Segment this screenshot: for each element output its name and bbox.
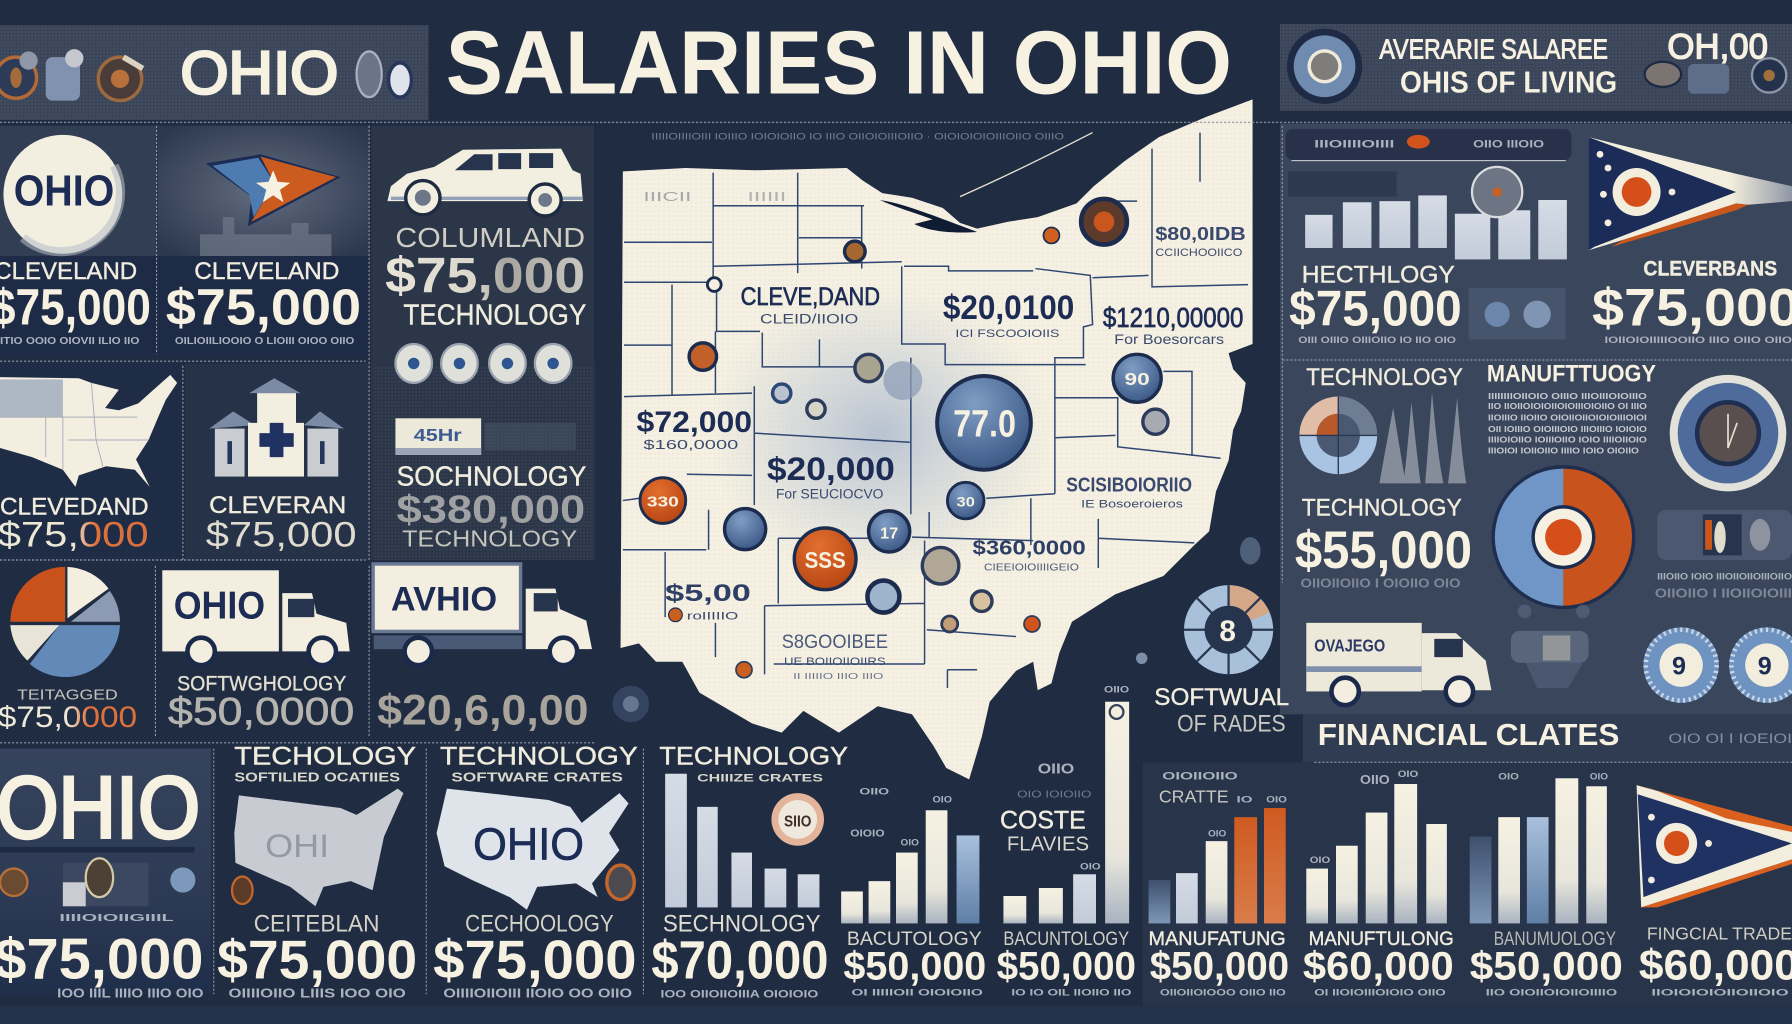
icon: badge: SIIO [784, 813, 811, 830]
icon: hospital building [209, 378, 344, 477]
value: $380,000 [397, 488, 585, 531]
panel: right header banner [1280, 24, 1792, 111]
icon: Ohio circle badge: OHIO [14, 168, 114, 216]
map label: 20,0100 [943, 289, 1074, 340]
chart: bars group C: IO [1237, 794, 1253, 804]
map text: faint corner labels: IIICII [643, 190, 691, 204]
chart: bars group D: OIO [1310, 855, 1330, 865]
caption: OILIOIILIOOIO O LIOIII OIOO OIIO [175, 336, 354, 347]
map label: Scisiboioriio: SCISIBOIORIIO [1066, 473, 1192, 496]
heading: software: SOFTWUAL [1154, 684, 1289, 711]
chart: donut [1299, 397, 1377, 474]
caption: IOO OIIOIIOIIIA OIOIOIO [661, 989, 818, 1001]
map text: faint corner labels [643, 190, 786, 204]
panel: white US map column [433, 743, 638, 1001]
map label: Cleveland [741, 283, 880, 326]
text block: costs [1000, 762, 1091, 855]
map label: 72,000 [637, 406, 752, 452]
map label: Scisiboioriio [1066, 473, 1192, 510]
value: $50,000 [843, 944, 986, 988]
heading: software [1154, 684, 1289, 737]
chart: bars group E [1470, 771, 1608, 923]
text block: costs: FLAVIES [1007, 832, 1089, 855]
marker: orange SSS [794, 528, 856, 590]
caption: financial side: OIO OI I IOEIOI [1669, 731, 1792, 746]
map label: 8gooibee: II IIIIIO IIIO IIIO [793, 672, 883, 681]
subheading: CHIIIZE CRATES [697, 773, 823, 785]
chart: pie [10, 567, 120, 677]
marker: orange 330: 330 [647, 494, 679, 510]
paragraph block: IIIIOIOIIO IOIIIOIIO IOIO IIIIOIIOIO [1488, 435, 1647, 444]
icon group: header emblems [1645, 58, 1786, 94]
label: MANUFATUNG [1149, 928, 1286, 950]
label: CLEVELAND [194, 258, 339, 285]
heading: financial: FINANCIAL CLATES [1318, 717, 1619, 752]
chart: bars group A [841, 786, 979, 923]
panel: US map cell [0, 363, 183, 560]
heading: TECHNOLOGY [659, 743, 848, 771]
label: COLUMLAND [395, 222, 585, 253]
label: TECHNOLOGY [1306, 364, 1463, 391]
value: $75,000 [433, 928, 637, 990]
label: TEITAGGED [17, 687, 118, 703]
marker group: small rings [689, 199, 1168, 678]
icon: ghost pin [1240, 537, 1261, 565]
paragraph block: IIIIIIIIOIIOIO OIIIO IIIOIIIOIOIIIO [1488, 392, 1647, 401]
heading: software: OF RADES [1177, 710, 1286, 737]
map label: 80,0IDB: $80,0IDB [1155, 223, 1246, 244]
icon: round badge [1287, 29, 1362, 104]
caption: OIIOIIOIOOO OIIO IIO [1160, 987, 1286, 997]
chart: large pie [1491, 465, 1635, 609]
heading: TECHNOLOGY [440, 743, 638, 771]
chart: bars group A: OIO [901, 838, 919, 848]
icon: faded US map: OHI [265, 828, 329, 864]
chart: dotted spikes [1379, 392, 1466, 483]
label: MANUFTULONG [1309, 928, 1454, 950]
icon: medal [1472, 167, 1522, 217]
chart: ring dial [1670, 375, 1786, 491]
chart: bars group C: OIO [1208, 829, 1226, 839]
chart: bars group D: OIIO [1360, 773, 1390, 787]
icon: faded portraits [1657, 510, 1792, 560]
value: $50,000 [1150, 944, 1289, 988]
icon: segmented gauge: 8 [1219, 615, 1236, 648]
value: $60,000 [1303, 944, 1454, 988]
text block: costs: OIIO [1038, 762, 1074, 778]
panel: cell C vehicle and technology [371, 126, 594, 560]
panel: Ohio bottom left [0, 749, 211, 1001]
chart: descending bars [665, 774, 819, 907]
map label: Cleveland: CLEID/IIOIO [760, 311, 858, 326]
map label: 80,0IDB: CCIICHOOIICO [1155, 247, 1242, 259]
chart: bars group C: OIO [1266, 794, 1287, 804]
label: BACUNTOLOGY [1003, 928, 1129, 950]
chart: bars group E: OIO [1498, 771, 1519, 781]
chart: bars group B: OIO [1080, 862, 1101, 872]
label: MANUFTTUOGY [1487, 361, 1656, 388]
icon: rosette right [1729, 627, 1792, 703]
label: HECTHLOGY [1302, 261, 1455, 288]
header number: OH,00 [1667, 26, 1768, 66]
value: $60,000 [1639, 941, 1792, 988]
map label: 20,0100: $20,0100 [943, 289, 1074, 327]
label: BANUMUOLOGY [1494, 928, 1616, 950]
caption: OI IIIIIOII OIOIOIIO [851, 987, 983, 997]
marker: 77.0 [937, 376, 1031, 470]
label: CLEVERAN [209, 492, 346, 519]
panel: hospital cell [185, 363, 369, 560]
map label: 80,0IDB [1155, 223, 1246, 259]
panel: bar header strip [1286, 129, 1571, 197]
label: TECHNOLOGY [403, 300, 586, 332]
map label: 1210,00000 [1103, 302, 1243, 347]
map label: 72,000: $160,0000 [643, 438, 738, 452]
caption: IO IO OIL IIOIIO IIO [1011, 987, 1131, 997]
value: $70,000 [651, 930, 829, 990]
value: $50,000 [997, 944, 1136, 988]
icon: faded US map [234, 789, 403, 906]
chart: bars group B [1003, 685, 1129, 923]
label: TECHNOLOGY [402, 525, 577, 551]
map label: 20,000 [767, 451, 895, 501]
label: TECHNOLOGY [1302, 494, 1462, 521]
label: SOCHNOLOGY [397, 461, 586, 492]
chart: bars group C [1149, 794, 1287, 923]
value: $55,000 [1295, 521, 1472, 580]
map label: 8gooibee [782, 631, 888, 681]
icon: Avhio truck: AVHIO [391, 580, 497, 618]
lake streak [960, 133, 1093, 197]
marker group: blue pins: 17 [880, 525, 898, 542]
title: SALARIES IN OHIO [446, 13, 1232, 114]
text block: costs: COSTE [1000, 807, 1086, 835]
value: $75,000 [206, 514, 357, 554]
panel: cell A Ohio badge [0, 126, 157, 357]
panel: pie chart cell [0, 567, 137, 734]
icon: US map with Ohio: OHIO [473, 818, 584, 869]
caption: OIIOIIOIIO I OIOIIO OIO [1301, 576, 1461, 590]
icon: small sign [395, 418, 576, 455]
icon: Ohio truck [162, 570, 350, 665]
value: $75,0000 [0, 701, 137, 734]
chart: bars group A: OIIO [859, 786, 889, 796]
panel: bar header strip: IIIOIIIIOIIII [1314, 138, 1394, 150]
label: SECHNOLOGY [663, 910, 821, 937]
marker: 77.0: 77.0 [953, 403, 1016, 445]
icon group: small medals [357, 51, 411, 97]
caption: IOO IIIL IIIIO IIIO OIO [57, 987, 204, 1001]
map label: 360,0000 [973, 536, 1086, 573]
icon: car [387, 149, 583, 216]
marker group: blue pins: 90 [1125, 369, 1150, 389]
caption: IIOIOIOIOIIOIIOIO [1651, 987, 1789, 997]
map text: top small: IIIIIOIIIIOIII IOIIIO IOIOIOIIO IO IIIO OIIOIOIIIOIIO · OIOIOIOIOIIIOIIO OIIIO [651, 131, 1064, 141]
label: CEITEBLAN [254, 910, 379, 937]
icon: pennant [206, 154, 341, 226]
icon: Ohio burgee flag [1589, 137, 1792, 250]
value: $50,000 [1470, 944, 1623, 988]
paragraph block: IIIOIOI IOIIOIIO IIIIO IOIO OIOIIO [1488, 447, 1639, 456]
map label: 8gooibee: S8GOOIBEE [782, 631, 888, 653]
marker group: blue pins [725, 354, 1161, 552]
paragraph block [1488, 392, 1647, 456]
caption lines: OIIOIIO I IIOIIOIOIII [1655, 587, 1792, 601]
icon: marker [607, 865, 634, 899]
caption: IOIIOIOIIIIIOOIIO IIIO OIIO OIIO [1605, 335, 1792, 345]
icon: Ohio circle badge [3, 135, 122, 254]
caption: ITIO OOIO OIOVII ILIO IIO [0, 336, 139, 347]
paragraph block: IIO IIOIIOIOIOIIOIOIIIOIOIIO OI IIIO [1488, 402, 1647, 411]
map label: 1210,00000: For Boesorcars [1114, 332, 1224, 347]
caption: IIO OIOIIOIOIIOIIIIO [1486, 987, 1617, 997]
caption: OIIIIOIIO LIIIS IOO OIO [229, 987, 406, 1001]
value: $75,000 [385, 247, 585, 304]
header label: OHIO: OHIO [181, 39, 338, 107]
chart: bars group D [1306, 769, 1447, 923]
chart: small bars [1305, 195, 1567, 259]
header text: average salaries: AVERARIE SALAREE [1379, 33, 1608, 64]
icon: segmented gauge [1184, 585, 1273, 674]
caption lines [1655, 571, 1792, 601]
map text: faint corner labels: IIIIII [747, 190, 786, 204]
caption: OI IIOIOIIIOIOIO OIIO [1314, 987, 1446, 997]
panel: left header banner [0, 25, 429, 120]
heading: OHIO: OHIO [0, 760, 200, 857]
header text: cost of living: OHIS OF LIVING [1400, 65, 1617, 100]
icon: US map with Ohio [437, 789, 629, 910]
value: 20,000: $20,6,0,00 [377, 687, 589, 734]
value: $75,000 [166, 278, 361, 336]
map label: 20,000: For SEUCIOCVO [776, 486, 883, 501]
chart: bars group B: OIIO [1104, 685, 1129, 695]
icon: Avhio truck [371, 562, 592, 665]
chart: bars group E: OIO [1590, 771, 1608, 781]
panel: cell B flag pennant [158, 126, 369, 357]
map label: 72,000: $72,000 [637, 406, 752, 439]
subheading: SOFTILIED OCATIIES [234, 771, 400, 785]
icon: faded figures [1469, 288, 1566, 339]
map label: 5,00 [665, 580, 751, 622]
map: Ohio state [621, 99, 1253, 779]
label: FINGCIAL TRADE [1647, 923, 1792, 943]
map label: 8gooibee: UE BOIIOIIOIIRS [784, 656, 886, 668]
label: CLEVEDAND [0, 493, 149, 520]
caption: OIII OIIIO OIIIOIIO IO IIO OIO [1298, 335, 1456, 345]
icon: marker [232, 877, 253, 904]
label: BACUTOLOGY [847, 928, 982, 950]
caption lines: IIIOIIO IOIO IIIOIIOIIOIIIOIIO [1657, 571, 1792, 581]
marker: orange 330 [640, 478, 686, 523]
icon row: pins [395, 344, 571, 383]
panel: lower right background [1303, 714, 1792, 762]
icon: rosette right: 9 [1758, 652, 1772, 680]
lake shadow [880, 200, 977, 233]
value: 50,000: $50,0000 [168, 691, 354, 734]
label: CLEVERBANS [1643, 255, 1777, 280]
value: $75,000 [1289, 280, 1462, 337]
map label: Scisiboioriio: IE Bosoeroieros [1081, 498, 1183, 510]
text block: crate [1159, 770, 1238, 806]
map label: 20,000: $20,000 [767, 451, 895, 487]
icon: faded machine [1511, 605, 1590, 688]
map label: Cleveland: CLEVE,DAND [741, 283, 880, 311]
chart: bars group A: OIO [933, 794, 952, 804]
text block: crate: OIOIIOIIO [1162, 770, 1238, 782]
icon: faint building [200, 217, 331, 256]
icon: badge [771, 793, 824, 846]
panel: grey US map column [217, 743, 417, 1001]
map label: 5,00: roIIIIIO [687, 610, 738, 622]
caption: IIIIOIOIIGIIIL [59, 913, 174, 924]
marker group: blue pins: 30 [957, 494, 975, 509]
icon: rosette left [1643, 627, 1719, 703]
heading: TECHOLOGY [234, 743, 416, 771]
value: $75,000 [0, 927, 203, 991]
text block: costs: OIO IOIOIIO [1017, 790, 1091, 801]
panel: bar header strip: OIIO IIIOIO [1473, 138, 1544, 150]
chart: bars group D: OIO [1398, 769, 1418, 779]
panel: right main section [1280, 123, 1792, 714]
icon: small sign: 45Hr [414, 425, 462, 445]
map label: 1210,00000: $1210,00000 [1103, 302, 1243, 333]
value: $75,000 [0, 514, 149, 554]
value: $75,000 [1592, 279, 1792, 338]
chart: bars group A: OIOIO [850, 829, 885, 840]
paragraph block: IIOIIIO IIOIIO OIOIIOIIOIOIOIIIOIOI [1488, 414, 1647, 423]
icon: globe [613, 686, 649, 722]
icon: truck: OVAJEGO [1314, 635, 1385, 655]
subheading: SOFTWARE CRATES [451, 771, 623, 785]
text block: crate: CRATTE [1159, 786, 1229, 806]
icon row [0, 858, 195, 906]
icon: Ohio truck: OHIO [174, 584, 265, 627]
label: CECHOOLOGY [465, 910, 614, 937]
map label: 360,0000: $360,0000 [973, 536, 1086, 559]
icon: truck [1306, 623, 1491, 705]
map label: 20,0100: ICI FSCOOIOIIS [955, 328, 1060, 340]
icon: United States map [0, 375, 177, 487]
panel: technology bar column [651, 743, 848, 1001]
paragraph block: OII IOIIIO OIOIIIOIO IIIOIIIO IOIOIO [1488, 425, 1647, 434]
map label: 5,00: $5,00 [665, 580, 751, 607]
icon: dot [1136, 653, 1147, 664]
map label: 360,0000: CIEEIOIOIIIIGEIO [984, 562, 1079, 573]
icon group: sports emblems [0, 49, 143, 101]
value: $75,000 [217, 928, 417, 990]
icon: rosette left: 9 [1672, 652, 1686, 680]
icon: bottom Ohio flag [1637, 785, 1792, 907]
label: software: SOFTWGHOLOGY [177, 670, 346, 695]
caption: OIIIIOIIOIII IIOIO OO OIIO [443, 987, 632, 1001]
marker: orange SSS: SSS [805, 547, 846, 573]
